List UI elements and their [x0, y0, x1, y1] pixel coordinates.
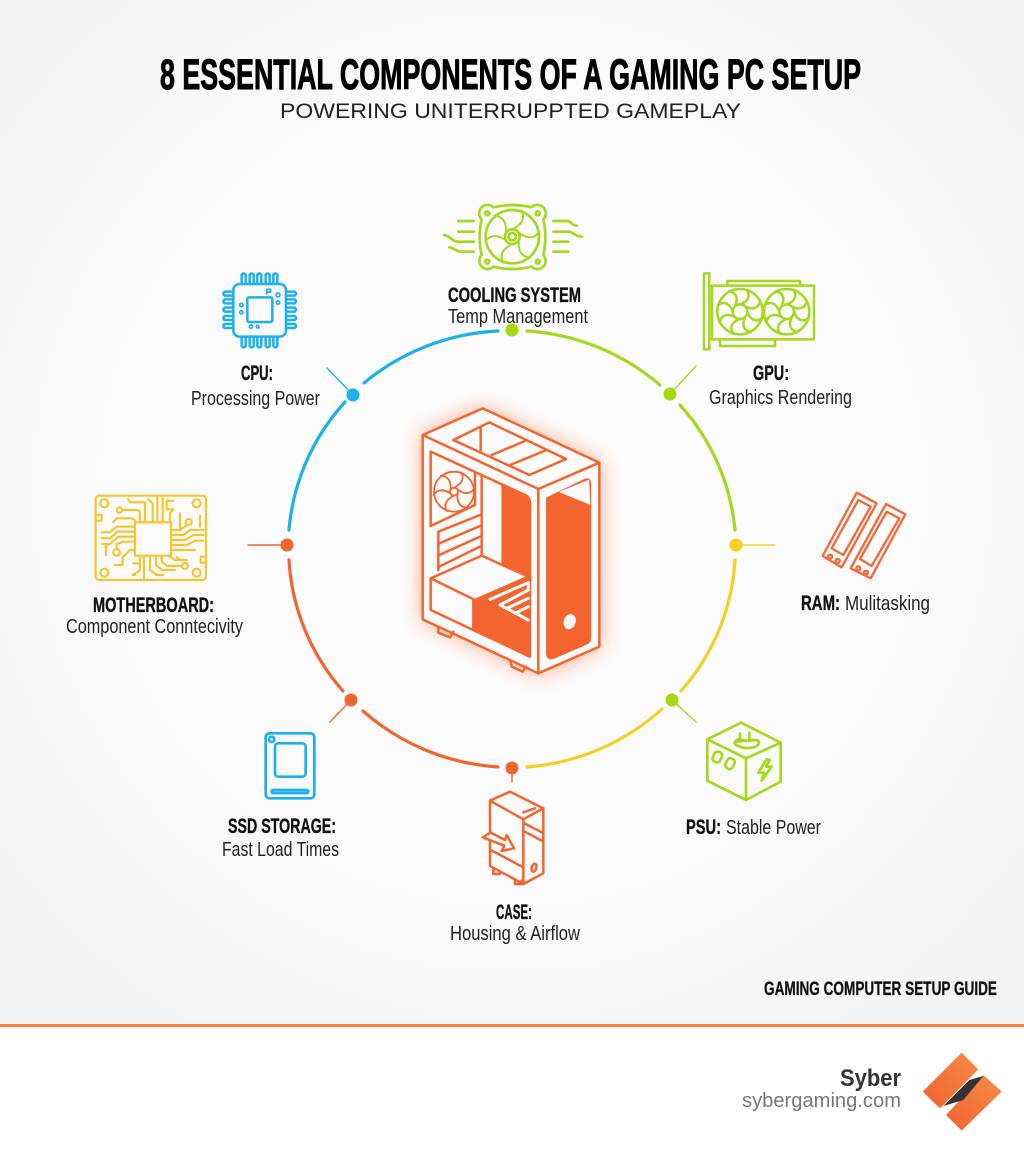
description: SSD storage: Fast Load Times	[222, 838, 339, 861]
component: cooling system	[444, 205, 588, 328]
icon: power supply	[707, 723, 781, 800]
label: cooling system: COOLING SYSTEM	[448, 284, 581, 307]
description: motherboard: Component Conntecivity	[66, 615, 244, 638]
component: CPU	[191, 273, 320, 410]
ring node dots	[280, 324, 742, 774]
component: GPU	[704, 273, 852, 409]
icon: tower case with arrow	[483, 792, 543, 884]
component: case	[450, 792, 580, 945]
footer band	[0, 1024, 1024, 1154]
component: PSU	[686, 723, 821, 839]
icon: motherboard	[96, 496, 206, 580]
icon: graphics card	[704, 273, 814, 349]
label: PSU: PSU:	[686, 816, 721, 839]
label: PSU: Stable Power	[726, 816, 821, 839]
icon: solid state drive	[266, 733, 314, 798]
label: RAM: Mulitasking	[845, 592, 930, 615]
ring arc: blue	[289, 331, 498, 530]
ring diagram	[248, 324, 775, 782]
label: CPU: CPU:	[241, 362, 273, 385]
description: GPU: Graphics Rendering	[709, 386, 852, 409]
icon: memory sticks	[823, 493, 905, 578]
logo	[923, 1053, 1002, 1131]
label: RAM: RAM:	[801, 592, 840, 615]
label: motherboard: MOTHERBOARD:	[93, 594, 214, 617]
icon: cooling fan	[444, 205, 582, 269]
component: motherboard	[66, 496, 244, 638]
label: SSD storage: SSD STORAGE:	[228, 815, 336, 838]
description: CPU: Processing Power	[191, 387, 320, 410]
ring arc: orange	[289, 560, 498, 767]
tick marks	[248, 366, 775, 782]
ring arc: green	[527, 331, 735, 530]
description: case: Housing & Airflow	[450, 922, 580, 945]
component: RAM	[801, 493, 930, 615]
label: case: CASE:	[496, 901, 532, 924]
subtitle: POWERING UNITERRUPPTED GAMEPLAY	[280, 99, 741, 123]
component: SSD storage	[222, 733, 339, 861]
label: GPU: GPU:	[753, 362, 789, 385]
icon: processor chip	[223, 273, 296, 347]
brand url: sybergaming.com	[742, 1089, 901, 1112]
brand name: Syber	[840, 1065, 901, 1092]
ring arc: yellow	[527, 560, 735, 767]
description: cooling system: Temp Management	[448, 305, 588, 328]
central icon: PC case	[423, 408, 599, 673]
